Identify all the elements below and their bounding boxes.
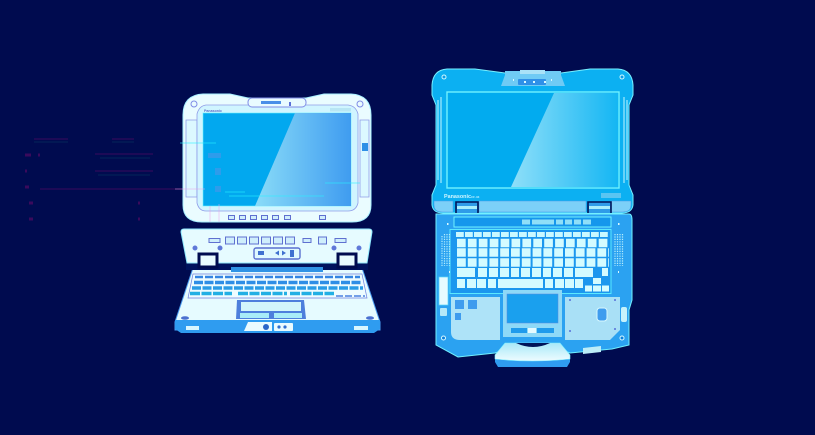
glitch lines at left [25,139,205,219]
keyboard [450,230,611,294]
lid screws [442,75,624,79]
dock centre plate [254,248,300,259]
lid label [601,193,621,198]
laptop lid [432,69,633,213]
left palm rest [451,297,500,340]
corner screws [442,336,624,340]
left port door [439,277,448,305]
lid lower strip [434,201,631,212]
small door [440,308,447,316]
touchpad [236,300,306,319]
keyboard base [175,254,380,333]
top camera bar [248,98,306,107]
glitch marks on tablet [180,143,360,196]
laptop 1: convertible tablet [175,94,380,333]
front strip [175,316,380,333]
laptop screen [447,92,619,188]
dock screws [192,246,362,251]
base screws [447,224,620,272]
sticker [583,346,601,354]
laptop 2: rugged clamshell [432,69,633,367]
side port [362,143,368,151]
hinges [199,254,217,267]
brand: Panasonic [444,194,471,200]
laptop hinges [456,202,478,213]
tablet screen [203,113,351,206]
keyboard well [188,274,367,298]
tablet buttons [228,216,326,220]
model text: CF-33 [471,195,480,199]
keyboard dock band [181,229,372,263]
top latch [501,70,565,86]
brand: Panasonic [204,109,222,113]
function strip [454,217,611,227]
label plate [330,108,351,112]
corner screws [191,101,363,107]
handle [495,343,570,367]
touchpad [503,290,562,337]
laptop base [436,214,632,357]
right port [621,307,627,322]
speaker grilles [442,234,622,266]
tablet body [175,94,371,222]
right palm rest [565,297,620,340]
